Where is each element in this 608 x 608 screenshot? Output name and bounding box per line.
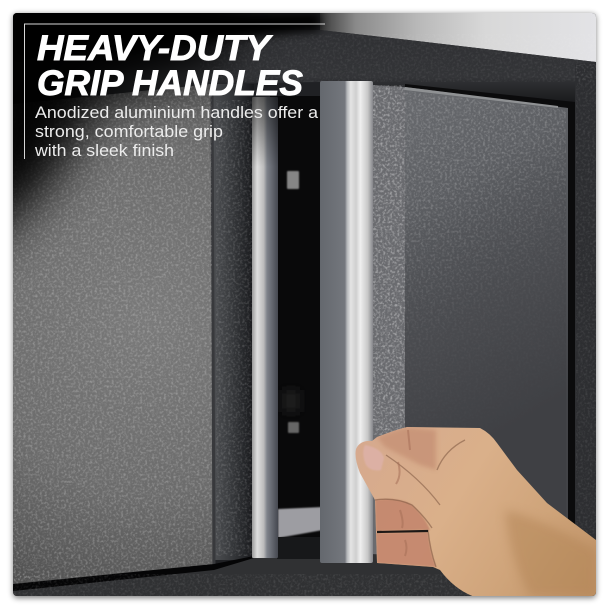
decorative frame around heading <box>24 24 325 159</box>
finger creases <box>375 440 465 567</box>
title: GRIP HANDLES <box>37 64 303 103</box>
lower fingers <box>375 499 436 567</box>
thumbnail <box>363 445 384 470</box>
right door smooth dark lower area <box>405 151 566 440</box>
title: HEAVY-DUTY <box>37 29 273 68</box>
title <box>37 29 303 103</box>
dark shadow line around right door <box>405 84 575 530</box>
bottom cabinet frame <box>13 553 596 596</box>
left door side gap <box>214 84 243 560</box>
left door edge highlight <box>212 84 214 564</box>
description text <box>34 103 319 160</box>
back of hand shading <box>505 510 596 596</box>
right door edge <box>372 85 405 565</box>
gap between fingers <box>377 531 428 532</box>
knuckle creases <box>396 430 410 556</box>
left door panel <box>13 84 214 586</box>
description text: strong, comfortable grip <box>35 122 223 141</box>
description text: with a sleek finish <box>34 141 174 160</box>
cabinet top frame <box>158 30 596 88</box>
right door top highlight <box>405 87 558 108</box>
description text: Anodized aluminium handles offer a <box>35 103 319 122</box>
hand gripping handle <box>350 420 600 600</box>
left aluminium handle <box>252 97 278 558</box>
black opening between handles <box>270 96 320 537</box>
background wall <box>320 13 596 62</box>
dark shadow over top-left corner <box>0 0 250 260</box>
papers inside cabinet <box>278 507 323 538</box>
right door face <box>405 87 568 565</box>
bottom door shadow <box>13 556 254 591</box>
right aluminium handle <box>320 81 373 563</box>
cabinet right frame <box>575 62 596 540</box>
index finger shading <box>377 427 436 470</box>
top-left black cap <box>13 13 326 42</box>
